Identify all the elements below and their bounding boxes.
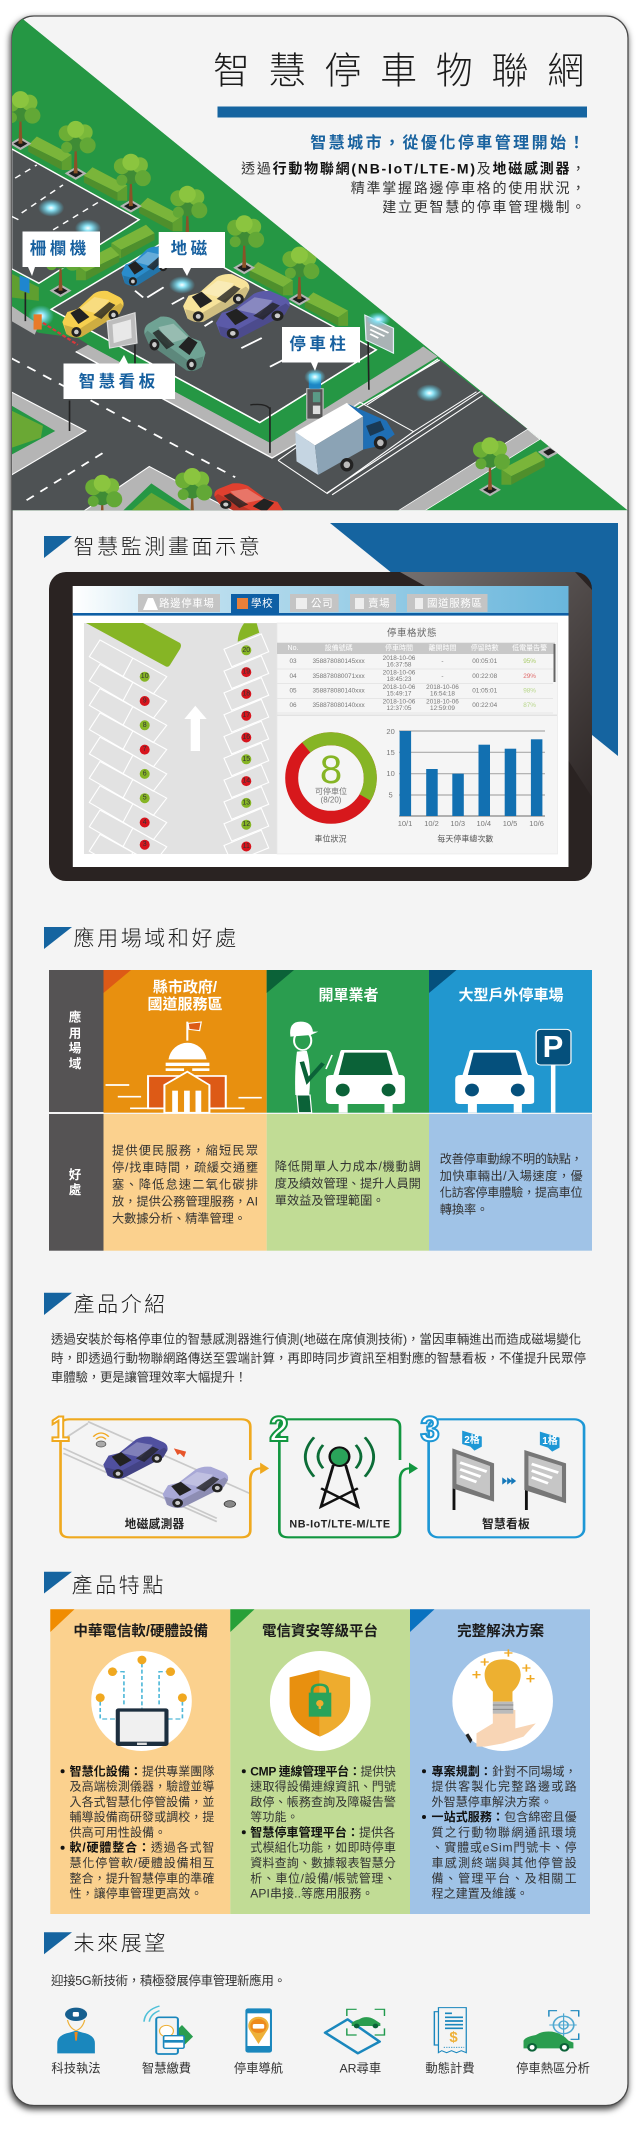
parking map: 16 <box>242 734 250 741</box>
feature list: hardware: 及高端檢測儀器，驗證並導 <box>70 1779 214 1794</box>
bar chart: 10/1 <box>398 819 412 828</box>
feature list: total solution: 、實體或eSim門號卡、停 <box>432 1840 577 1855</box>
status table: 358878080140xxx <box>312 702 366 709</box>
flow step 3: smart signboards: 3 <box>420 1410 440 1449</box>
intro text: 建立更智慧的停車管理機制。 <box>382 199 587 215</box>
bar chart: 5 <box>389 790 393 800</box>
icon: dynamic billing <box>425 2008 475 2075</box>
donut chart: 8 <box>320 748 342 792</box>
heading: future outlook: 未來展望 <box>74 1932 168 1956</box>
bar chart: 10/5 <box>503 819 517 828</box>
parking map: 4 <box>143 819 147 826</box>
future outlook sentence: 迎接5G新技術，積極發展停車管理新應用。 <box>51 1973 286 1988</box>
icon: dynamic billing: 動態計費 <box>425 2060 475 2075</box>
donut chart <box>292 739 370 844</box>
feature list: hardware: 整合，提升智慧停車的準確 <box>70 1870 214 1885</box>
parking map: 11 <box>243 843 250 850</box>
status table: 06 <box>289 702 297 709</box>
status table: 00:05:01 <box>472 658 498 665</box>
hero illustration: isometric parking lot <box>0 0 628 534</box>
callout: smart signboard <box>64 355 175 399</box>
feature list: hardware: 輔導設備商研發或調校，提 <box>70 1809 214 1824</box>
parking map: 15 <box>242 756 250 763</box>
callout: smart signboard: 智慧看板 <box>79 371 159 391</box>
status table: 29% <box>523 673 536 680</box>
bar chart: 10/2 <box>424 819 439 828</box>
donut chart: 車位狀況 <box>314 834 346 844</box>
parking map: 9 <box>143 698 147 704</box>
status table: 2018-10-06 <box>383 684 416 691</box>
parking map: 17 <box>242 712 250 719</box>
icon: smart payment <box>142 2006 193 2075</box>
status table: 低電量告警 <box>512 643 547 652</box>
donut chart: (8/20) <box>321 796 342 804</box>
row label: application fields: 域 <box>69 1056 82 1071</box>
feature panel: total solution <box>410 1609 590 1914</box>
status table: 03 <box>289 658 297 665</box>
feature list: total solution <box>422 1763 577 1900</box>
benefit text: outdoor lots: 化訪客停車體驗，提高車位 <box>440 1185 583 1200</box>
icon: parking navigation: 停車導航 <box>234 2060 283 2075</box>
parking map: 6 <box>143 770 147 777</box>
feature list: security platform: API串接..等應用服務。 <box>250 1885 374 1900</box>
flow step 3: smart signboards: 2格 <box>464 1433 480 1446</box>
status table: 2018-10-06 <box>426 684 459 691</box>
heading: product features <box>44 1572 166 1598</box>
column title: government: 國道服務區 <box>147 996 223 1013</box>
benefit text: outdoor lots: 改善停車動線不明的缺點， <box>440 1151 583 1166</box>
flow step 2: NB-IoT network <box>269 1410 418 1537</box>
feature list: total solution: 車感測終端與其他停管設 <box>432 1855 577 1870</box>
status table: 2018-10-06 <box>426 698 459 706</box>
product intro paragraph: 透過安裝於每格停車位的智慧感測器進行偵測(地磁在席偵測技術)，當因車輛進出而造成磁場變化 <box>51 1331 581 1346</box>
bar chart: 每天停車總次數 <box>437 834 493 844</box>
parking map: 18 <box>242 690 250 697</box>
flow step 2: NB-IoT network: NB-IoT/LTE-M/LTE <box>289 1518 391 1530</box>
donut chart: 可停車位 <box>315 786 347 796</box>
icon: dynamic billing: $ <box>449 2029 458 2046</box>
bar chart <box>386 727 545 844</box>
intro text <box>241 160 587 215</box>
bar chart: 10/6 <box>529 819 544 828</box>
column title: government: 縣市政府/ <box>153 978 218 996</box>
status table: 設備號碼 <box>325 643 353 652</box>
status table: 95% <box>523 658 536 665</box>
bar chart: 20 <box>386 727 395 736</box>
icon: smart payment: 智慧繳費 <box>142 2060 191 2075</box>
benefit text: operators <box>275 1159 421 1208</box>
parking map: 3 <box>143 841 147 848</box>
dashboard tabs: 賣場 <box>368 596 390 610</box>
bar chart: 10/4 <box>476 819 491 828</box>
flow step 3: smart signboards: 1格 <box>542 1434 558 1447</box>
feature list: hardware: 供高可用性設備。 <box>70 1824 166 1839</box>
tagline: 智慧城市，從優化停車管理開始！ <box>310 133 587 152</box>
feature panel: hardware: 中華電信軟/硬體設備 <box>73 1622 208 1640</box>
row label: application fields: 場 <box>69 1041 82 1056</box>
icon: parking heatmap analysis: 停車熱區分析 <box>516 2060 590 2075</box>
parking map: 12 <box>242 821 250 828</box>
column title: government <box>147 978 223 1013</box>
benefit text: government: 放，提供公務管理服務，AI <box>112 1194 258 1209</box>
parking map: 13 <box>242 799 250 806</box>
icon: light bulb in hand <box>452 1649 553 1751</box>
benefit text: government: 提供便民服務，縮短民眾 <box>112 1143 258 1158</box>
product intro paragraph: 時，即透過行動物聯網路傳送至雲端計算，再即時同步資訊至相對應的智慧看板，不僅提升民眾停 <box>51 1350 586 1365</box>
status table <box>277 623 558 854</box>
intro text: 精準掌握路邊停車格的使用狀況， <box>351 180 587 196</box>
icon: technology enforcement: 科技執法 <box>51 2060 101 2075</box>
column title: outdoor lots: 大型戶外停車場 <box>458 986 564 1004</box>
dashboard tabs: 學校 <box>251 596 273 610</box>
status table: 358878080140xxx <box>312 688 366 694</box>
feature list: security platform: 資料查詢、數據報表智慧分 <box>250 1855 396 1870</box>
feature list: security platform: 等功能。 <box>250 1809 299 1824</box>
table: application fields and benefits <box>49 970 592 1251</box>
status table: 04 <box>289 673 297 680</box>
benefit text: operators: 度及績效管理、提升人員開 <box>275 1176 421 1191</box>
status table: 2018-10-06 <box>383 655 416 662</box>
flow step 2: NB-IoT network: 2 <box>269 1410 289 1449</box>
column title: ticketing operators: 開單業者 <box>318 986 379 1004</box>
feature list: total solution: 專案規劃：針對不同場域， <box>432 1763 577 1778</box>
big blue corner triangle <box>330 523 618 756</box>
row label: benefits: 處 <box>69 1183 82 1197</box>
feature list: total solution: 備、管理平台、及相關工 <box>432 1870 577 1885</box>
benefit text: government: 大數據分析、精準管理。 <box>112 1211 246 1226</box>
tablet mockup <box>49 572 592 888</box>
status table: 358878080071xxx <box>312 673 366 680</box>
benefit text: government: 停/找車時間，疏緩交通壅 <box>112 1160 258 1175</box>
benefit text: operators: 降低開單人力成本/機動調 <box>275 1159 421 1174</box>
feature list: security platform: CMP 連線管理平台：提供快 <box>250 1763 396 1778</box>
row label: benefits <box>69 1167 82 1197</box>
benefit text: government: 塞、降低怠速二氧化碳排 <box>112 1177 258 1192</box>
callout: barrier gate: 柵欄機 <box>30 239 90 258</box>
dashboard tabs <box>138 594 488 613</box>
status table: 00:22:08 <box>472 673 498 680</box>
status table: 358878080145xxx <box>312 658 366 665</box>
heading: product features: 產品特點 <box>72 1574 166 1598</box>
dashboard tabs: 國道服務區 <box>427 596 482 610</box>
feature list: hardware: 性，讓停車管理更高效。 <box>70 1885 203 1900</box>
status table: 05 <box>289 688 297 694</box>
feature list: total solution: 一站式服務：包含綿密且優 <box>432 1809 577 1824</box>
benefit text: outdoor lots: 加快車輛出/入場速度，優 <box>440 1168 583 1183</box>
feature list: total solution: 提供客製化完整路邊或路 <box>432 1779 577 1794</box>
benefit text: outdoor lots <box>440 1151 583 1217</box>
status table: 16:54:18 <box>430 690 455 698</box>
flow step 1: geomagnetic sensor: 地磁感測器 <box>125 1517 185 1531</box>
feature list: security platform: 智慧停車管理平台：提供各 <box>250 1824 395 1839</box>
status table: 16:37:58 <box>387 662 412 668</box>
flow step 3: smart signboards: 智慧看板 <box>482 1517 530 1531</box>
feature list: hardware <box>61 1763 214 1900</box>
row label: benefits: 好 <box>69 1167 82 1182</box>
status table: - <box>441 658 444 665</box>
flow step 1: geomagnetic sensor: 1 <box>50 1410 70 1449</box>
feature list: hardware: 入各式智慧化停管設備，並 <box>70 1794 214 1809</box>
intro text: 透過行動物聯網(NB-IoT/LTE-M)及地磁感測器， <box>241 160 587 176</box>
callout: geomagnetic sensor: 地磁 <box>171 239 211 258</box>
benefit text: operators: 單效益及管理範圍。 <box>275 1193 384 1208</box>
icon: capitol building <box>106 1022 262 1113</box>
flow step 1: geomagnetic sensor <box>50 1410 269 1537</box>
status table: 2018-10-06 <box>383 670 416 676</box>
benefit text: outdoor lots: 轉換率。 <box>440 1202 488 1217</box>
feature panel: security platform: 電信資安等級平台 <box>262 1622 378 1640</box>
parking map <box>84 623 277 854</box>
status table: 停留時數 <box>471 643 499 652</box>
status table: 00:22:04 <box>472 702 498 709</box>
feature list: total solution: 外智慧停車解決方案。 <box>432 1794 553 1809</box>
status table: 離開時間 <box>428 643 456 652</box>
feature panel: hardware <box>50 1609 230 1914</box>
feature list: hardware: 慧化停管軟/硬體設備相互 <box>70 1855 214 1870</box>
icon: parking heatmap analysis <box>516 2011 590 2075</box>
icon: tablet with connections <box>91 1651 192 1751</box>
dashboard tabs: 公司 <box>311 598 333 610</box>
benefit text: government <box>112 1143 258 1226</box>
status table: 87% <box>523 702 536 709</box>
parking map: 19 <box>242 669 250 676</box>
icon: AR car finder <box>325 2009 384 2075</box>
feature list: security platform: 析、車位/設備/帳號管理、 <box>250 1870 396 1885</box>
feature list: total solution: 程之建置及維護。 <box>432 1885 528 1900</box>
status table: 98% <box>523 688 536 694</box>
bar chart: 10/3 <box>450 819 465 828</box>
status table: 12:59:09 <box>430 705 455 712</box>
parking map: 8 <box>143 722 147 729</box>
feature list: security platform <box>242 1763 396 1900</box>
status table: 2018-10-06 <box>383 698 416 706</box>
heading: application fields: 應用場域和好處 <box>74 928 239 950</box>
feature list: security platform: 式模組化功能，如即時停車 <box>250 1840 396 1855</box>
parking map: 20 <box>242 647 250 654</box>
feature list: security platform: 速取得設備連線資訊、門號 <box>250 1779 396 1794</box>
icon: parking sign and car: P <box>543 1029 563 1064</box>
flow step 3: smart signboards <box>420 1410 584 1537</box>
heading: monitoring: 智慧監測畫面示意 <box>74 536 262 559</box>
heading: product intro: 產品介紹 <box>74 1294 168 1316</box>
status table: - <box>441 673 444 680</box>
callout: parking post: 停車柱 <box>289 334 349 354</box>
feature panel: total solution: 完整解決方案 <box>457 1622 544 1640</box>
icon: shield with lock <box>270 1651 371 1751</box>
feature list: total solution: 質之行動物聯網通訊環境 <box>432 1824 577 1839</box>
status table: No. <box>288 645 298 652</box>
parking map: 7 <box>143 746 147 753</box>
row label: application fields <box>69 1010 82 1071</box>
row label: application fields: 應 <box>69 1010 82 1025</box>
status table: 15:49:17 <box>387 690 412 698</box>
parking map: 5 <box>143 795 147 802</box>
feature list: hardware: 智慧化設備：提供專業團隊 <box>70 1763 214 1778</box>
dashboard tabs: 路邊停車場 <box>159 596 214 610</box>
feature panel: security platform <box>230 1609 410 1914</box>
product intro paragraph: 車體驗，更是讓管理效率大幅提升！ <box>51 1369 247 1384</box>
status table: 停車格狀態 <box>387 627 437 639</box>
bar chart: 10 <box>386 769 395 778</box>
parking map: 10 <box>141 673 149 680</box>
status table: 18:45:23 <box>387 676 412 683</box>
status table: 12:37:05 <box>387 705 412 712</box>
callout: parking post <box>282 327 360 371</box>
icon: technology enforcement <box>51 2008 101 2075</box>
feature list: security platform: 啟停、帳務查詢及障礙告警 <box>250 1794 396 1809</box>
row label: application fields: 用 <box>69 1026 81 1040</box>
callout: barrier gate <box>22 232 100 276</box>
icon: parking navigation <box>234 2008 283 2075</box>
bar chart: 15 <box>386 748 395 757</box>
icon: parking sign and car <box>455 1029 571 1113</box>
title underline bar <box>218 106 587 118</box>
feature list: hardware: 軟/硬體整合：透過各式智 <box>70 1840 214 1855</box>
icon: ticketing officer and car <box>290 1022 405 1113</box>
icon: AR car finder: AR尋車 <box>339 2061 381 2075</box>
status table: 01:05:01 <box>472 688 498 694</box>
title: 智慧停車物聯網 <box>213 50 603 92</box>
product intro paragraph <box>51 1331 586 1384</box>
status table: 停車時間 <box>385 643 413 652</box>
callout: geomagnetic sensor <box>159 232 225 276</box>
parking map: 14 <box>242 778 250 785</box>
